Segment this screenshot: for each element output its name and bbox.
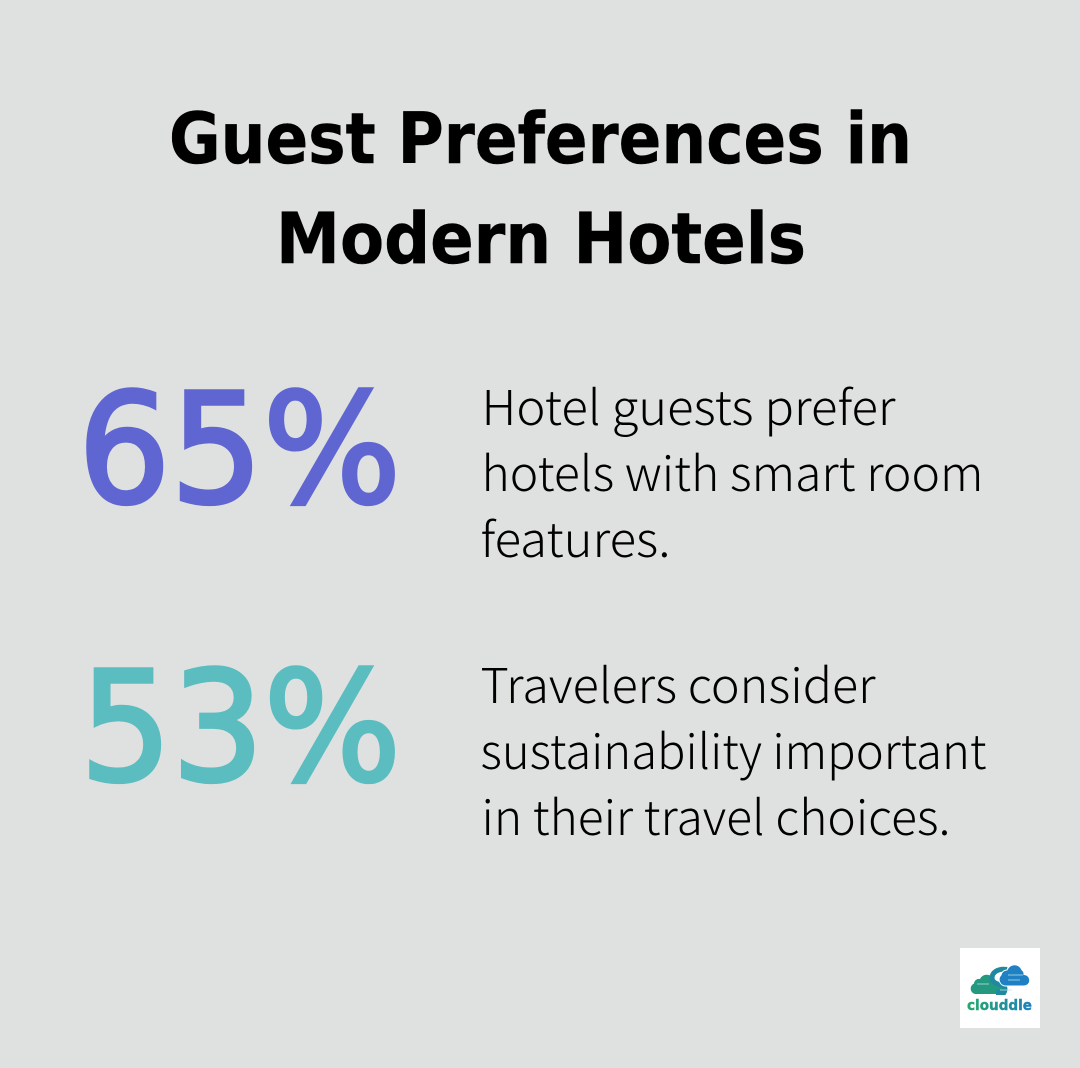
stat: 53%: 53% (80, 639, 401, 816)
icon: right cloud (999, 965, 1030, 986)
logo wordmark: clouddle (967, 998, 1032, 1014)
icon: left cloud (971, 975, 1003, 994)
icon: middle swirl (992, 969, 1007, 992)
text: smart room features (480, 369, 984, 571)
text: sustainability: Travelers consider (480, 647, 876, 717)
title: Guest Preferences in (169, 98, 912, 180)
text: smart room features: features. (480, 501, 670, 571)
title (169, 98, 912, 280)
text: smart room features: Hotel guests prefer (482, 369, 896, 439)
text: sustainability: in their travel choices. (482, 779, 950, 849)
text: smart room features: hotels with smart room (482, 435, 984, 505)
stat: 65%: 65% (78, 361, 401, 538)
text: sustainability: sustainability important (480, 713, 987, 783)
text: sustainability (480, 647, 987, 849)
icon: circuit lines (977, 975, 1023, 990)
logo: clouddle (960, 948, 1040, 1028)
title: Modern Hotels (276, 198, 806, 280)
